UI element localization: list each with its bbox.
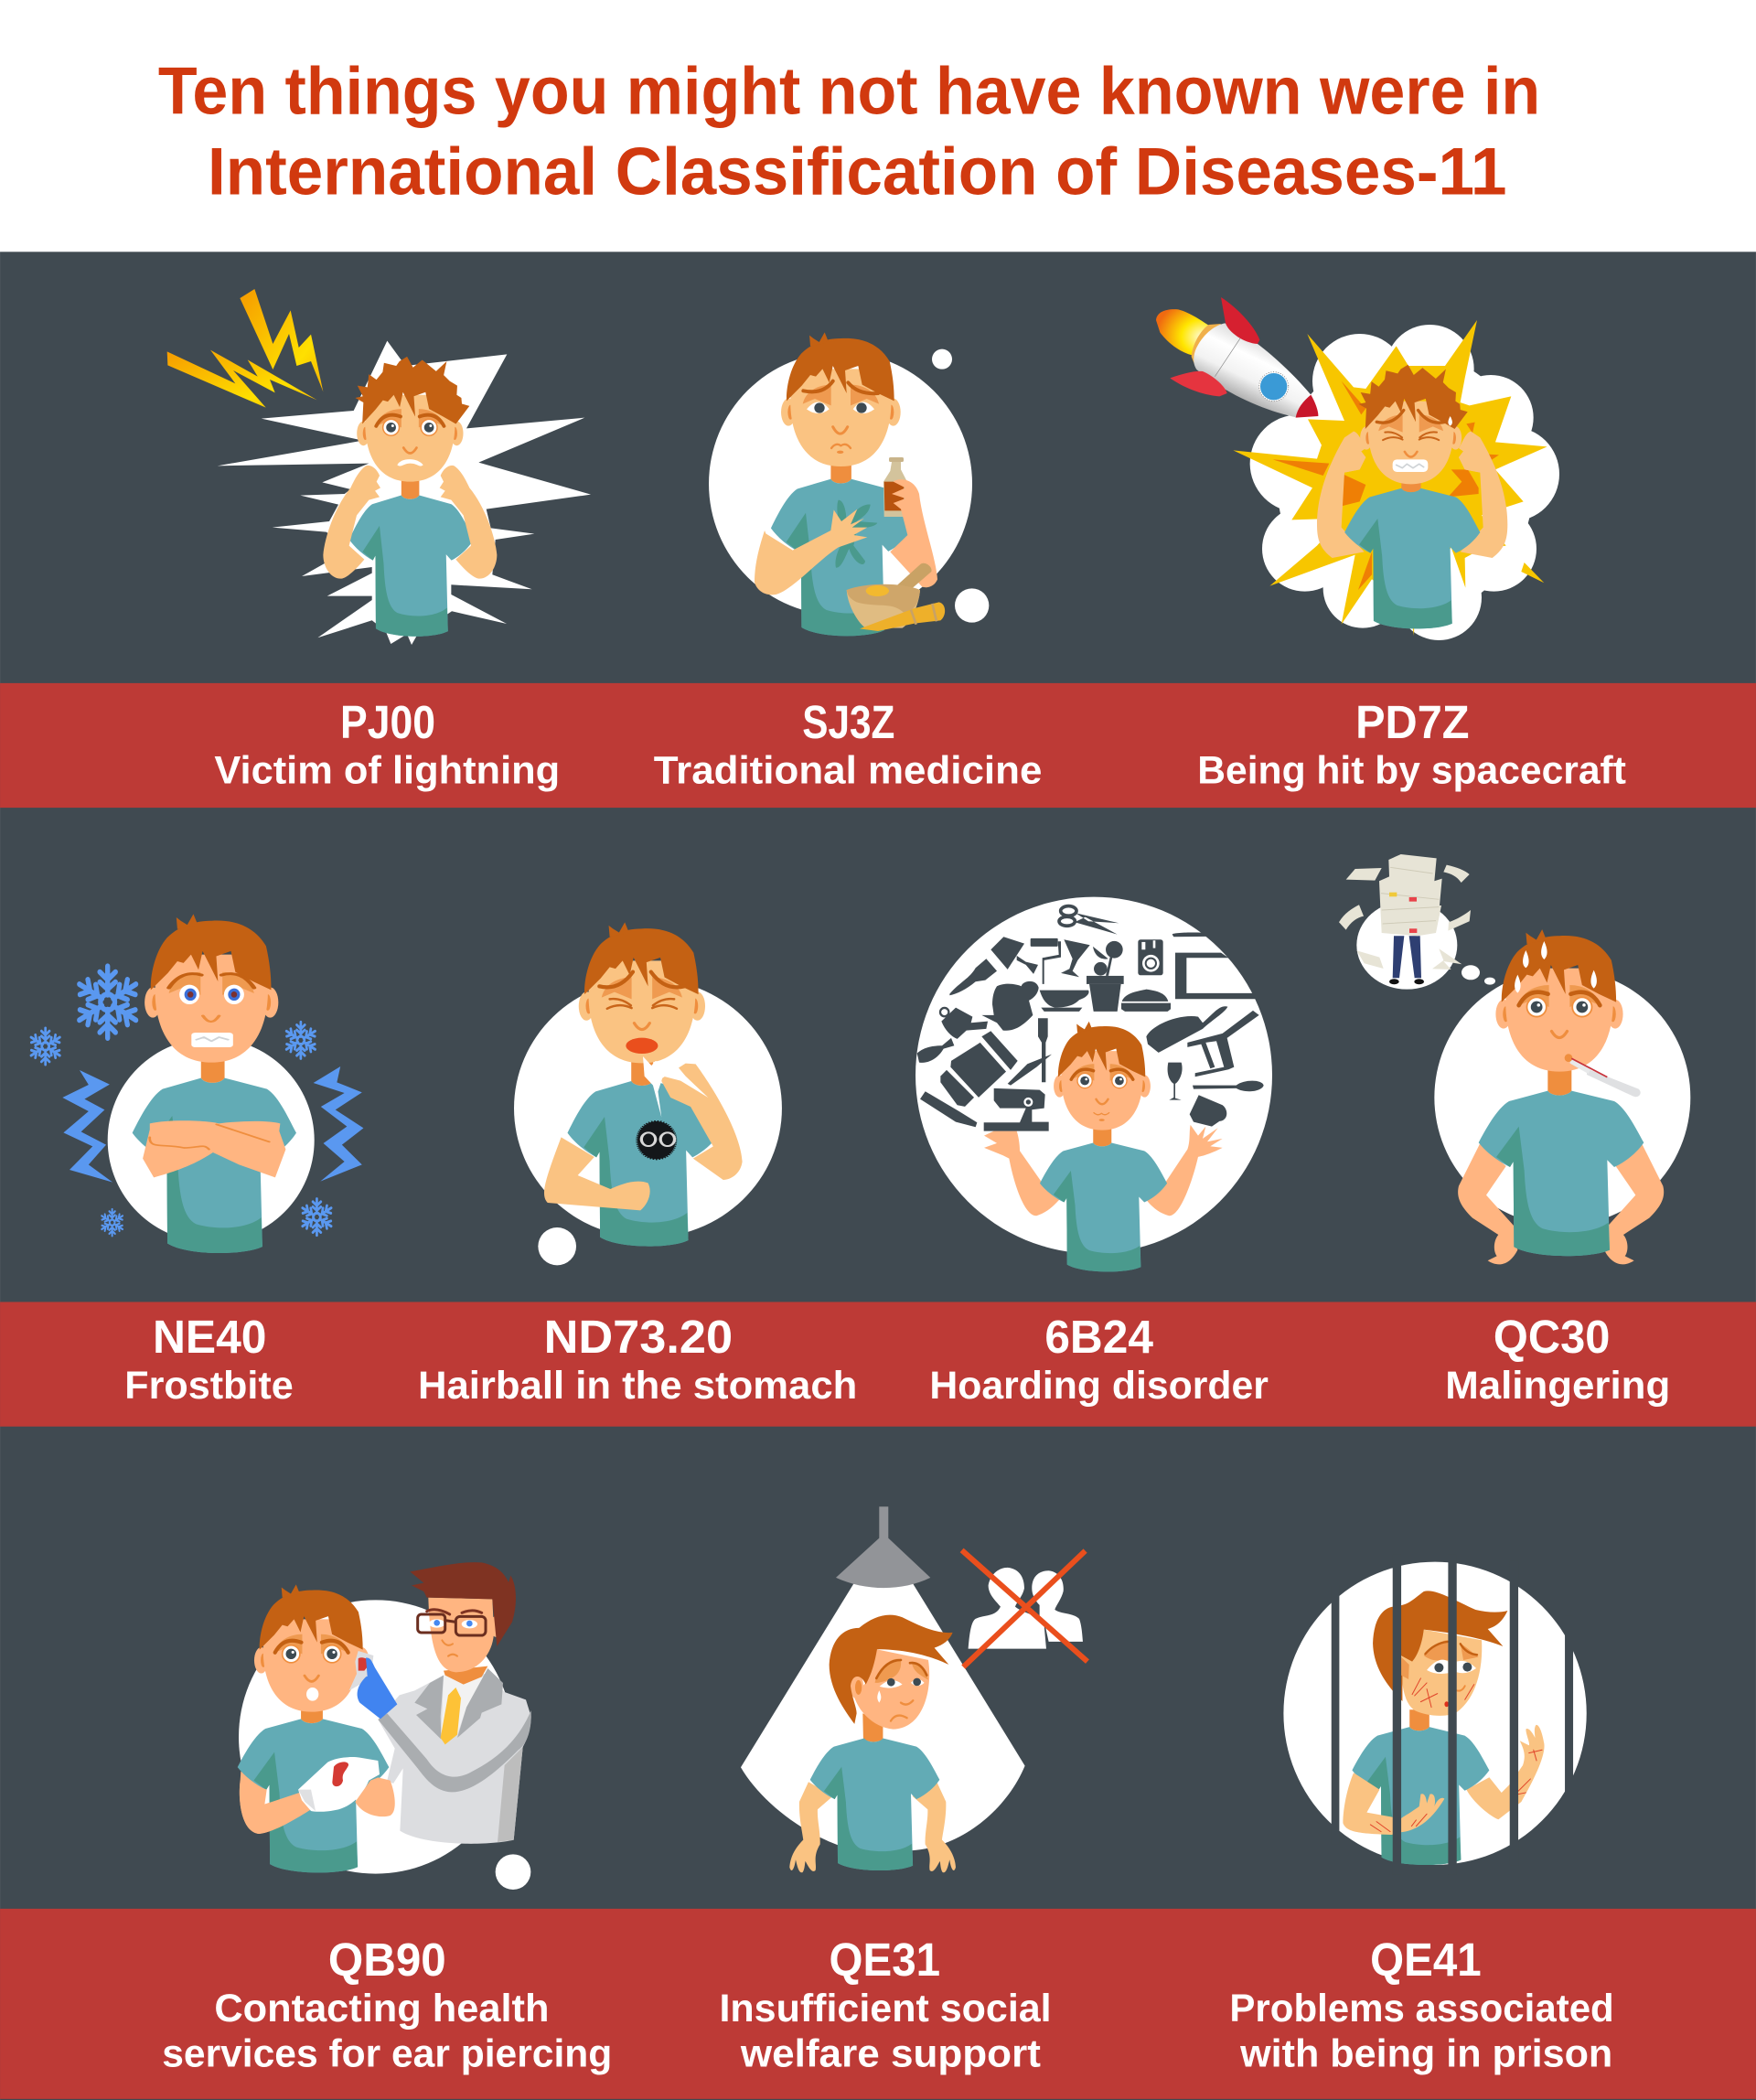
label: QE31	[719, 1934, 1052, 2075]
label: QB90: QB90	[328, 1934, 446, 1986]
figure: coughing boy	[544, 922, 743, 1247]
label: QE31: QE31	[830, 1934, 940, 1986]
label: QB90: Contacting health	[214, 1987, 549, 2030]
label: NE40: Frostbite	[124, 1364, 294, 1407]
icon: mortar and pestle	[847, 563, 945, 631]
figure: boy with ear injury	[238, 1584, 395, 1872]
label: SJ3Z: SJ3Z	[802, 696, 894, 748]
panel: malingering illustration	[1339, 854, 1690, 1264]
icon: white circle	[1434, 970, 1690, 1226]
label: 6B24: 6B24	[1044, 1311, 1153, 1363]
icon: hoarded objects	[917, 906, 1264, 1127]
label: QE31: Insufficient social	[719, 1987, 1052, 2030]
title	[158, 53, 1540, 209]
panel: frostbite illustration	[29, 914, 363, 1253]
figure: shocked boy	[323, 357, 497, 637]
icon: ceiling lamp	[836, 1506, 930, 1588]
icon: white circle and dot	[514, 979, 782, 1265]
label: QC30	[1445, 1311, 1670, 1407]
label: PD7Z	[1197, 696, 1626, 792]
panel: insufficient social welfare illustration	[741, 1506, 1087, 1872]
label: SJ3Z: Traditional medicine	[654, 749, 1042, 792]
figure: boy with herbs	[755, 332, 914, 636]
figure: boy with thermometer	[1458, 929, 1664, 1264]
label: PJ00: Victim of lightning	[214, 749, 560, 792]
icon: blue zigzags	[62, 1066, 363, 1183]
figure: injured prisoner	[1343, 1591, 1545, 1865]
label: 6B24: Hoarding disorder	[929, 1364, 1269, 1407]
figure: freezing boy	[133, 914, 296, 1253]
label: QB90: services for ear piercing	[162, 2032, 612, 2075]
panel: hoarding disorder illustration	[915, 897, 1272, 1271]
label: PJ00: PJ00	[340, 696, 435, 748]
label: QE41: Problems associated	[1229, 1987, 1614, 2030]
icon: crossed-out friends	[962, 1550, 1087, 1667]
panel: problems associated with prison illustration	[1283, 1555, 1587, 1875]
label: QC30: QC30	[1494, 1311, 1610, 1363]
panel: traditional medicine illustration	[709, 332, 989, 636]
figure: overwhelmed boy	[984, 1022, 1223, 1271]
band: row three labels	[0, 1909, 1756, 2099]
label: SJ3Z	[654, 696, 1042, 792]
band: row two labels	[0, 1302, 1756, 1427]
panel: victim of lightning illustration	[167, 289, 591, 645]
icon: white light cone	[741, 1584, 1025, 1850]
icon: white circle with thought dots	[709, 349, 989, 623]
label: QE41: QE41	[1370, 1934, 1482, 1986]
icon: rocket	[1156, 297, 1318, 418]
label: PD7Z: PD7Z	[1355, 696, 1470, 748]
label: QE31: welfare support	[740, 2032, 1041, 2075]
panel: being hit by spacecraft illustration	[1156, 297, 1559, 640]
icon: white circle and dot	[239, 1600, 530, 1890]
figure: boy holding head	[1317, 365, 1507, 628]
figure: doctor	[378, 1562, 531, 1844]
icon: prison bars	[1332, 1555, 1573, 1875]
label: ND73.20: Hairball in the stomach	[418, 1364, 857, 1407]
icon: white circle	[108, 1038, 315, 1242]
icon: white circle	[1283, 1562, 1587, 1865]
icon: snowflakes	[29, 966, 333, 1236]
label: NE40	[124, 1311, 294, 1407]
label: QE41: with being in prison	[1239, 2032, 1612, 2075]
label: NE40: NE40	[153, 1311, 266, 1363]
panel: hairball illustration	[514, 922, 782, 1265]
label: ND73.20	[418, 1311, 857, 1407]
icon: bottle in hand	[883, 457, 937, 587]
icon: explosion star	[1233, 320, 1547, 636]
icon: lightning bolts	[167, 289, 323, 408]
icon: hairball	[637, 1121, 676, 1159]
label: 6B24	[929, 1311, 1269, 1407]
icon: thermometer	[1565, 1054, 1641, 1097]
icon: blue glove with gauze	[349, 1651, 397, 1719]
figure: lonely boy	[789, 1615, 956, 1872]
icon: thought bubble with paper stack	[1339, 854, 1495, 990]
icon: white burst	[218, 341, 591, 645]
label: PJ00	[214, 696, 560, 792]
icon: white circle	[915, 897, 1272, 1254]
label: PD7Z: Being hit by spacecraft	[1197, 749, 1626, 792]
panel: ear piercing illustration	[238, 1562, 531, 1890]
label: QE41	[1229, 1934, 1614, 2075]
label: ND73.20: ND73.20	[544, 1311, 733, 1363]
icon: white cloud	[1250, 325, 1559, 640]
band: row one labels	[0, 683, 1756, 808]
title: Ten things you might not have known were in	[158, 53, 1540, 128]
label: QC30: Malingering	[1445, 1364, 1670, 1407]
title: International Classification of Diseases-11	[208, 134, 1507, 209]
label: QB90	[162, 1934, 612, 2075]
